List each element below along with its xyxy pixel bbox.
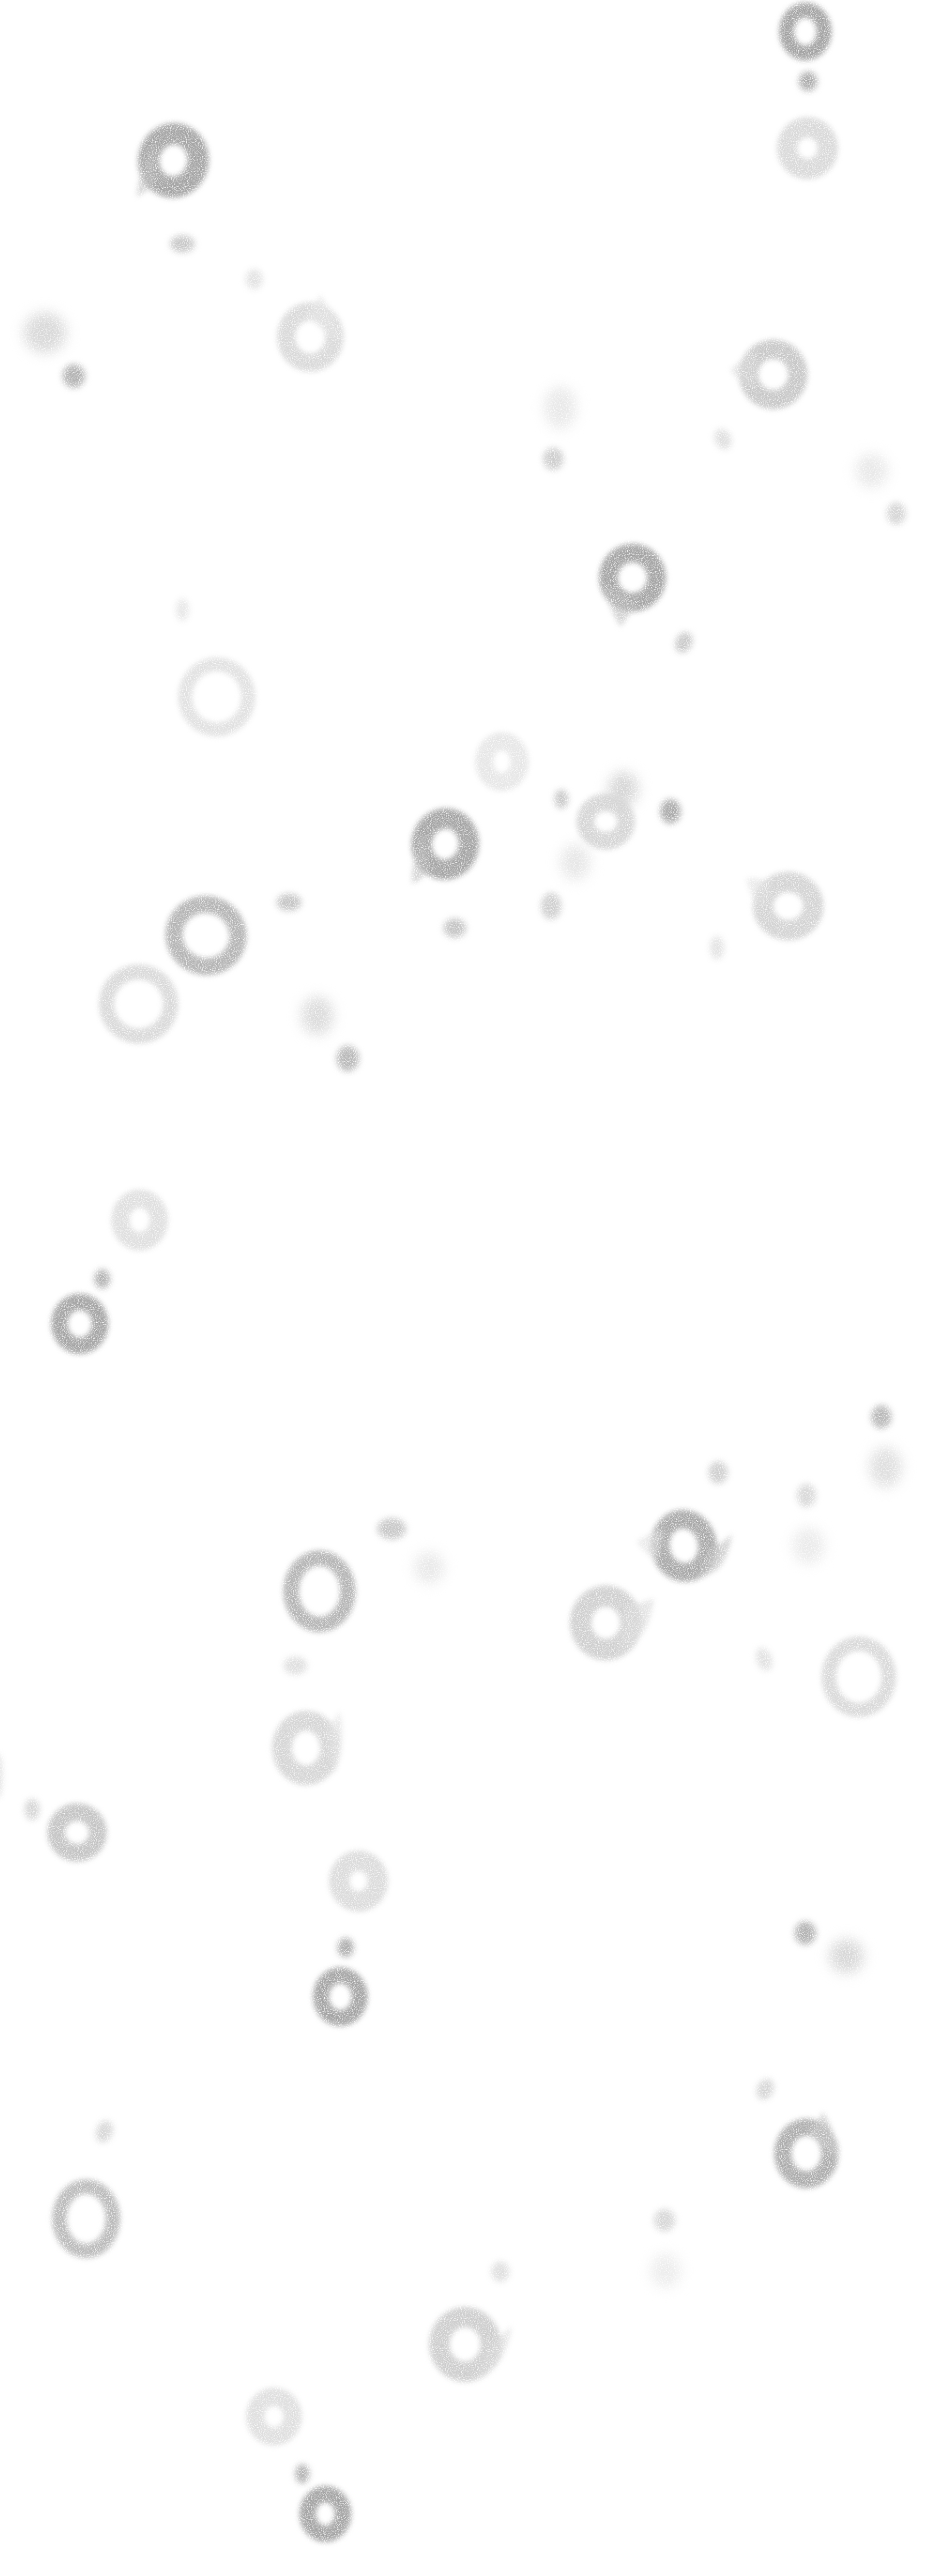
ring 9 with tail bbox=[286, 294, 339, 363]
dot 61 bbox=[93, 2118, 116, 2145]
blob 26 bbox=[560, 844, 590, 880]
ring 43 with tails bbox=[637, 1515, 732, 1581]
ring 47 bbox=[291, 1558, 348, 1624]
ring 70 bbox=[308, 2494, 343, 2534]
ring 20 bbox=[484, 741, 520, 782]
dot 6 bbox=[246, 269, 263, 289]
dot 39 bbox=[871, 1405, 891, 1429]
dot 8 bbox=[63, 364, 85, 388]
dot 66 bbox=[491, 2261, 509, 2282]
dot 64 bbox=[654, 2209, 675, 2232]
ring 52 with tail bbox=[282, 1711, 342, 1775]
blob 65 bbox=[651, 2253, 681, 2288]
ring 25 with tail bbox=[412, 815, 472, 884]
blob 46 bbox=[414, 1552, 444, 1584]
ring 32 bbox=[165, 895, 247, 976]
blob 21 bbox=[608, 772, 638, 806]
dot 51 bbox=[284, 1657, 307, 1675]
dot 58 bbox=[795, 1921, 816, 1945]
ring 63 bbox=[59, 2187, 113, 2251]
dot 31 bbox=[710, 936, 724, 960]
dot 69 bbox=[295, 2464, 309, 2483]
dot 45 bbox=[377, 1518, 406, 1539]
dot 53 bbox=[25, 1799, 40, 1820]
ring 3 bbox=[787, 127, 828, 169]
ring 67 with tail bbox=[439, 2317, 512, 2380]
ring 68 bbox=[255, 2397, 293, 2436]
blob 10 bbox=[544, 386, 576, 429]
ring 12 with tail bbox=[730, 349, 798, 400]
dot 56 bbox=[338, 1938, 354, 1957]
ring 54 bbox=[56, 1812, 98, 1853]
dot 17 bbox=[672, 630, 696, 655]
dot 18 bbox=[176, 599, 189, 621]
blob 14 bbox=[856, 454, 888, 488]
dot 13 bbox=[711, 426, 735, 452]
dot 37 bbox=[94, 1269, 110, 1289]
dot 15 bbox=[887, 502, 906, 525]
ring 33 bbox=[106, 972, 171, 1036]
dot 27 bbox=[277, 894, 301, 911]
ring 16 with tail bbox=[604, 553, 657, 627]
edge fragment bbox=[0, 1753, 2, 1798]
ring 22 bbox=[585, 802, 626, 841]
dot 49 bbox=[753, 1646, 775, 1673]
dot 42 bbox=[797, 1484, 816, 1507]
ring 30 with tail bbox=[746, 878, 813, 930]
ring 55 bbox=[339, 1861, 378, 1902]
ring 62 with tail bbox=[783, 2112, 838, 2180]
blob 44 bbox=[792, 1528, 825, 1564]
ring 19 bbox=[185, 664, 248, 730]
dot 24 bbox=[660, 799, 681, 824]
ring 50 bbox=[829, 1644, 889, 1710]
ring 4 with tail bbox=[137, 130, 202, 197]
blob 7 bbox=[24, 312, 66, 353]
dot 11 bbox=[543, 448, 563, 470]
blob 59 bbox=[829, 1939, 864, 1973]
dot 60 bbox=[753, 2076, 777, 2102]
ring 36 bbox=[120, 1199, 159, 1241]
dot 35 bbox=[337, 1046, 359, 1071]
dot 2 bbox=[799, 72, 817, 91]
blob 40 bbox=[870, 1447, 902, 1488]
ring 1 bbox=[787, 10, 824, 53]
dot 23 bbox=[554, 789, 568, 809]
dot 41 bbox=[708, 1461, 728, 1484]
ring 57 bbox=[321, 1975, 360, 2018]
blob 34 bbox=[301, 996, 333, 1035]
dot 5 bbox=[170, 235, 195, 252]
dot 28 bbox=[444, 918, 466, 938]
ring 38 bbox=[59, 1302, 100, 1346]
dot 29 bbox=[541, 893, 561, 919]
ring 48 with tail bbox=[581, 1596, 654, 1653]
